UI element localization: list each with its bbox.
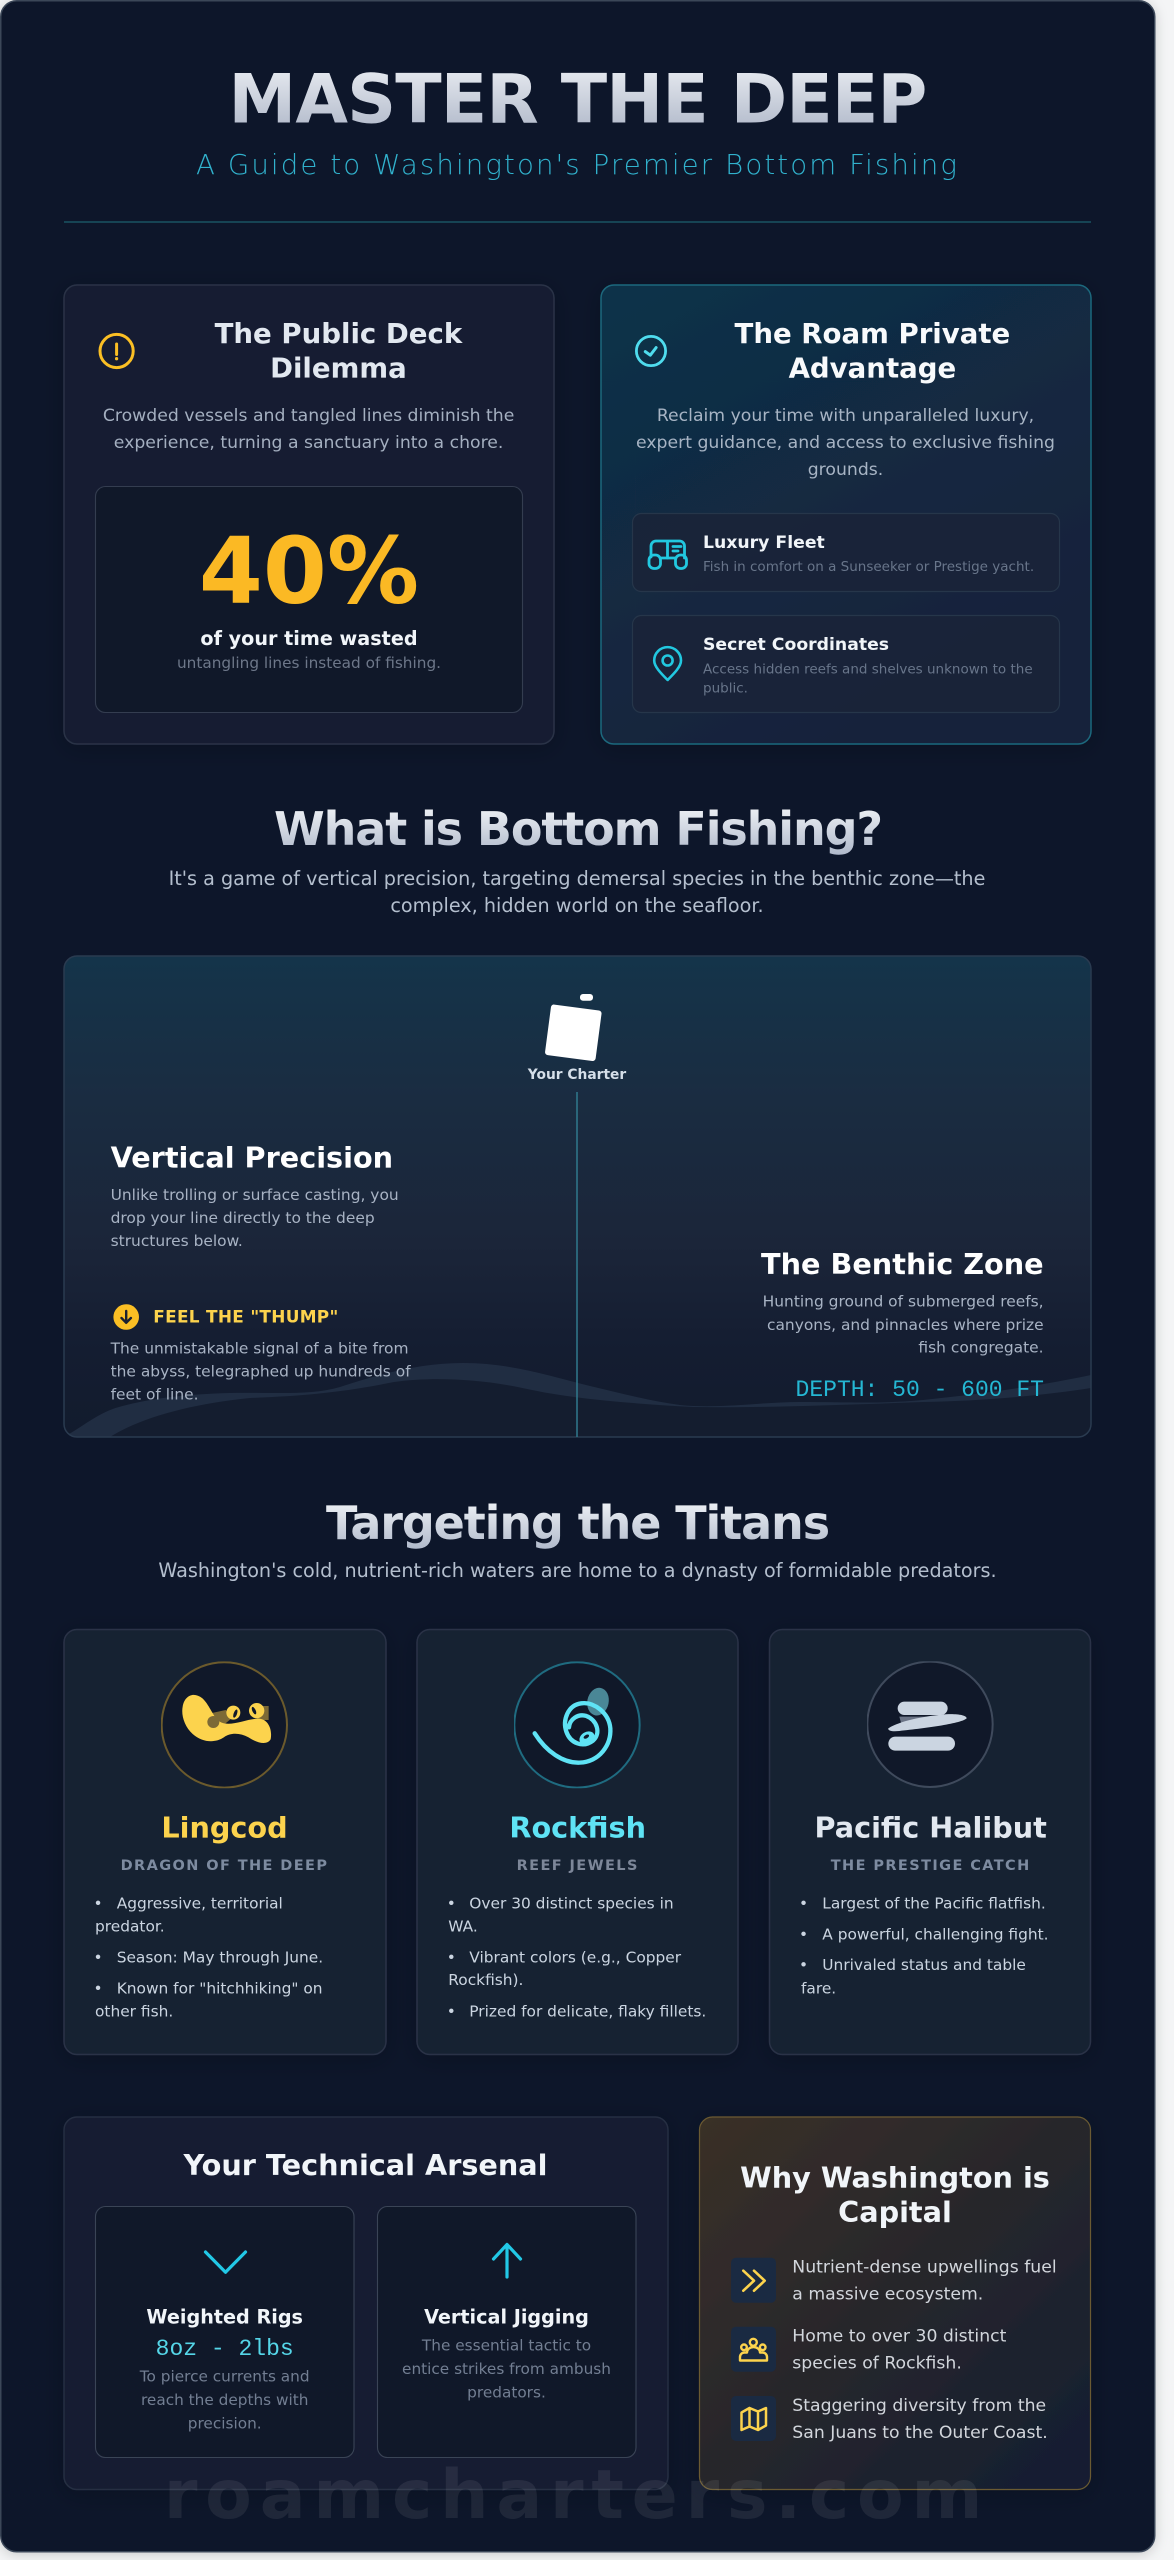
species facts — [94, 1895, 323, 2021]
feature: secret coordinates: Access hidden reefs and shelves unknown to the — [703, 661, 1033, 677]
card: pacific halibut — [770, 1630, 1090, 2054]
species facts: • — [799, 1895, 808, 1913]
reason: rockfish species — [731, 2327, 1007, 2374]
species facts: • — [447, 1948, 456, 1966]
tool description: precision. — [188, 2414, 262, 2432]
species facts: • — [447, 2003, 456, 2021]
tool: weighted rigs — [96, 2206, 354, 2458]
stat label: of your time wasted — [200, 627, 418, 650]
species tagline: THE PRESTIGE CATCH — [831, 1858, 1031, 1874]
species tagline: REEF JEWELS — [517, 1858, 639, 1874]
section heading: targeting the titans: Targeting the Titans — [326, 1496, 829, 1550]
icon: chevrons right — [731, 2258, 776, 2303]
species facts: • — [799, 1956, 808, 1974]
tool description: reach the depths with — [141, 2391, 308, 2409]
species facts: Over 30 distinct species in — [469, 1895, 674, 1913]
heading: Capital — [838, 2195, 952, 2229]
tool description: entice strikes from ambush — [402, 2360, 611, 2378]
species facts: • — [94, 1895, 103, 1913]
reason: upwellings — [731, 2257, 1057, 2304]
species facts: • — [94, 1948, 103, 1966]
icon: group — [731, 2327, 776, 2372]
benthic zone: fish congregate. — [918, 1339, 1044, 1357]
reason: rockfish species: Home to over 30 distinct — [792, 2327, 1007, 2347]
seafloor waves — [64, 1363, 1091, 1437]
species facts: Season: May through June. — [117, 1948, 323, 1966]
heading: Advantage — [789, 352, 956, 384]
icon: map pin — [654, 647, 681, 680]
icon: map — [731, 2396, 776, 2441]
species facts: other fish. — [95, 2003, 173, 2021]
icon: rockfish — [514, 1661, 641, 1788]
tool description: To pierce currents and — [139, 2368, 310, 2386]
species facts: A powerful, challenging fight. — [822, 1925, 1049, 1943]
section heading: targeting the titans — [158, 1496, 997, 1582]
species name: Pacific Halibut — [814, 1811, 1047, 1845]
feature: secret coordinates: public. — [703, 680, 748, 696]
species facts: predator. — [95, 1918, 165, 1936]
reason: diversity: San Juans to the Outer Coast. — [792, 2423, 1048, 2443]
feature: secret coordinates — [632, 616, 1060, 712]
icon: fleet — [649, 541, 686, 568]
icon: check circle — [636, 336, 666, 366]
tool name: Weighted Rigs — [146, 2305, 303, 2328]
icon: chevron down — [206, 2252, 246, 2272]
description: expert guidance, and access to exclusive fishing — [636, 433, 1055, 453]
feature: luxury fleet — [632, 514, 1060, 592]
reason: diversity: Staggering diversity from the — [792, 2396, 1046, 2416]
stat box: 40 percent — [96, 486, 522, 712]
vertical precision — [111, 1141, 399, 1250]
species facts: Largest of the Pacific flatfish. — [822, 1895, 1046, 1913]
benthic zone: canyons, and pinnacles where prize — [767, 1316, 1044, 1334]
species facts: Known for "hitchhiking" on — [117, 1979, 323, 1997]
species facts: fare. — [801, 1979, 836, 1997]
weight range: 8oz - 2lbs — [156, 2336, 294, 2362]
icon: halibut — [867, 1661, 994, 1788]
feel the thump: feet of line. — [111, 1386, 199, 1404]
watermark: roamcharters.com — [164, 2456, 990, 2535]
panel: technical arsenal — [64, 2117, 668, 2490]
species facts: WA. — [448, 1918, 478, 1936]
header — [196, 60, 959, 181]
title: MASTER THE DEEP — [228, 60, 926, 140]
heading: Dilemma — [270, 352, 407, 384]
species tagline: DRAGON OF THE DEEP — [121, 1858, 328, 1874]
stat note: untangling lines instead of fishing. — [177, 654, 441, 672]
card: lingcod — [64, 1630, 386, 2054]
feel the thump: The unmistakable signal of a bite from — [110, 1339, 408, 1357]
species facts — [447, 1895, 706, 2021]
description: grounds. — [808, 460, 883, 480]
species facts: • — [94, 1979, 103, 1997]
benthic zone: The Benthic Zone — [761, 1247, 1044, 1281]
species facts: • — [799, 1925, 808, 1943]
feel the thump: FEEL THE "THUMP" — [153, 1307, 339, 1327]
panel: roam private advantage — [601, 285, 1091, 744]
icon: lingcod — [161, 1661, 288, 1788]
description: experience, turning a sanctuary into a chore. — [114, 433, 503, 453]
reason: rockfish species: species of Rockfish. — [792, 2354, 962, 2374]
panel: why washington is capital — [700, 2117, 1090, 2490]
subtitle: A Guide to Washington's Premier Bottom Fishing — [196, 148, 959, 181]
section heading: what is bottom fishing: What is Bottom Fishing? — [274, 802, 882, 856]
panel: vertical diagram — [64, 956, 1091, 1437]
species facts: Prized for delicate, flaky fillets. — [469, 2003, 706, 2021]
feature: luxury fleet: Fish in comfort on a Sunseeker or Prestige yacht. — [703, 559, 1034, 575]
vertical precision: Vertical Precision — [111, 1141, 393, 1175]
species facts: Vibrant colors (e.g., Copper — [469, 1948, 682, 1966]
vertical precision: Unlike trolling or surface casting, you — [111, 1186, 399, 1204]
vertical precision: structures below. — [111, 1232, 243, 1250]
reason: diversity — [731, 2396, 1048, 2443]
species facts: • — [447, 1895, 456, 1913]
feature text: Secret Coordinates — [703, 635, 889, 655]
feel the thump — [110, 1304, 411, 1404]
species facts — [799, 1895, 1049, 1997]
depth readout: DEPTH: 50 - 600 FT — [796, 1377, 1044, 1403]
benthic zone: Hunting ground of submerged reefs, — [763, 1293, 1044, 1311]
reason: upwellings: Nutrient-dense upwellings fuel — [792, 2257, 1057, 2277]
stat number: 40% — [199, 518, 419, 624]
benthic zone — [761, 1247, 1044, 1403]
heading: Why Washington is — [740, 2160, 1050, 2194]
heading: The Public Deck — [215, 317, 463, 350]
icon: arrow up — [494, 2244, 520, 2277]
reason: upwellings: a massive ecosystem. — [792, 2284, 983, 2304]
fishing line — [576, 1092, 578, 1437]
species name: Rockfish — [509, 1811, 646, 1845]
species facts: Rockfish). — [448, 1971, 523, 1989]
description: Crowded vessels and tangled lines diminish the — [103, 406, 514, 426]
tool: vertical jigging — [378, 2206, 636, 2458]
tool description: The essential tactic to — [421, 2337, 591, 2355]
heading: Your Technical Arsenal — [183, 2148, 547, 2182]
feature text: Luxury Fleet — [703, 533, 825, 553]
species facts: Aggressive, territorial — [117, 1895, 283, 1913]
tool name: Vertical Jigging — [424, 2305, 589, 2328]
feel the thump: the abyss, telegraphed up hundreds of — [111, 1362, 411, 1380]
section heading: what is bottom fishing — [169, 802, 985, 917]
icon: alert circle — [100, 334, 133, 368]
section intro: It's a game of vertical precision, targeting demersal species in the benthic zone—the — [169, 867, 985, 890]
species name: Lingcod — [161, 1811, 288, 1845]
section intro: Washington's cold, nutrient-rich waters are home to a dynasty of formidable predators. — [158, 1559, 997, 1582]
icon: arrow down circle — [113, 1304, 139, 1330]
species facts: Unrivaled status and table — [822, 1956, 1026, 1974]
heading: The Roam Private — [735, 317, 1010, 350]
section intro: complex, hidden world on the seafloor. — [390, 894, 764, 917]
vertical precision: drop your line directly to the deep — [111, 1209, 375, 1227]
icon: charter boat — [545, 994, 602, 1061]
panel: public deck dilemma — [64, 285, 554, 744]
description: Reclaim your time with unparalleled luxury, — [657, 406, 1034, 426]
tool description: predators. — [467, 2383, 546, 2401]
boat label: Your Charter — [527, 1067, 626, 1083]
card: rockfish — [417, 1630, 738, 2054]
